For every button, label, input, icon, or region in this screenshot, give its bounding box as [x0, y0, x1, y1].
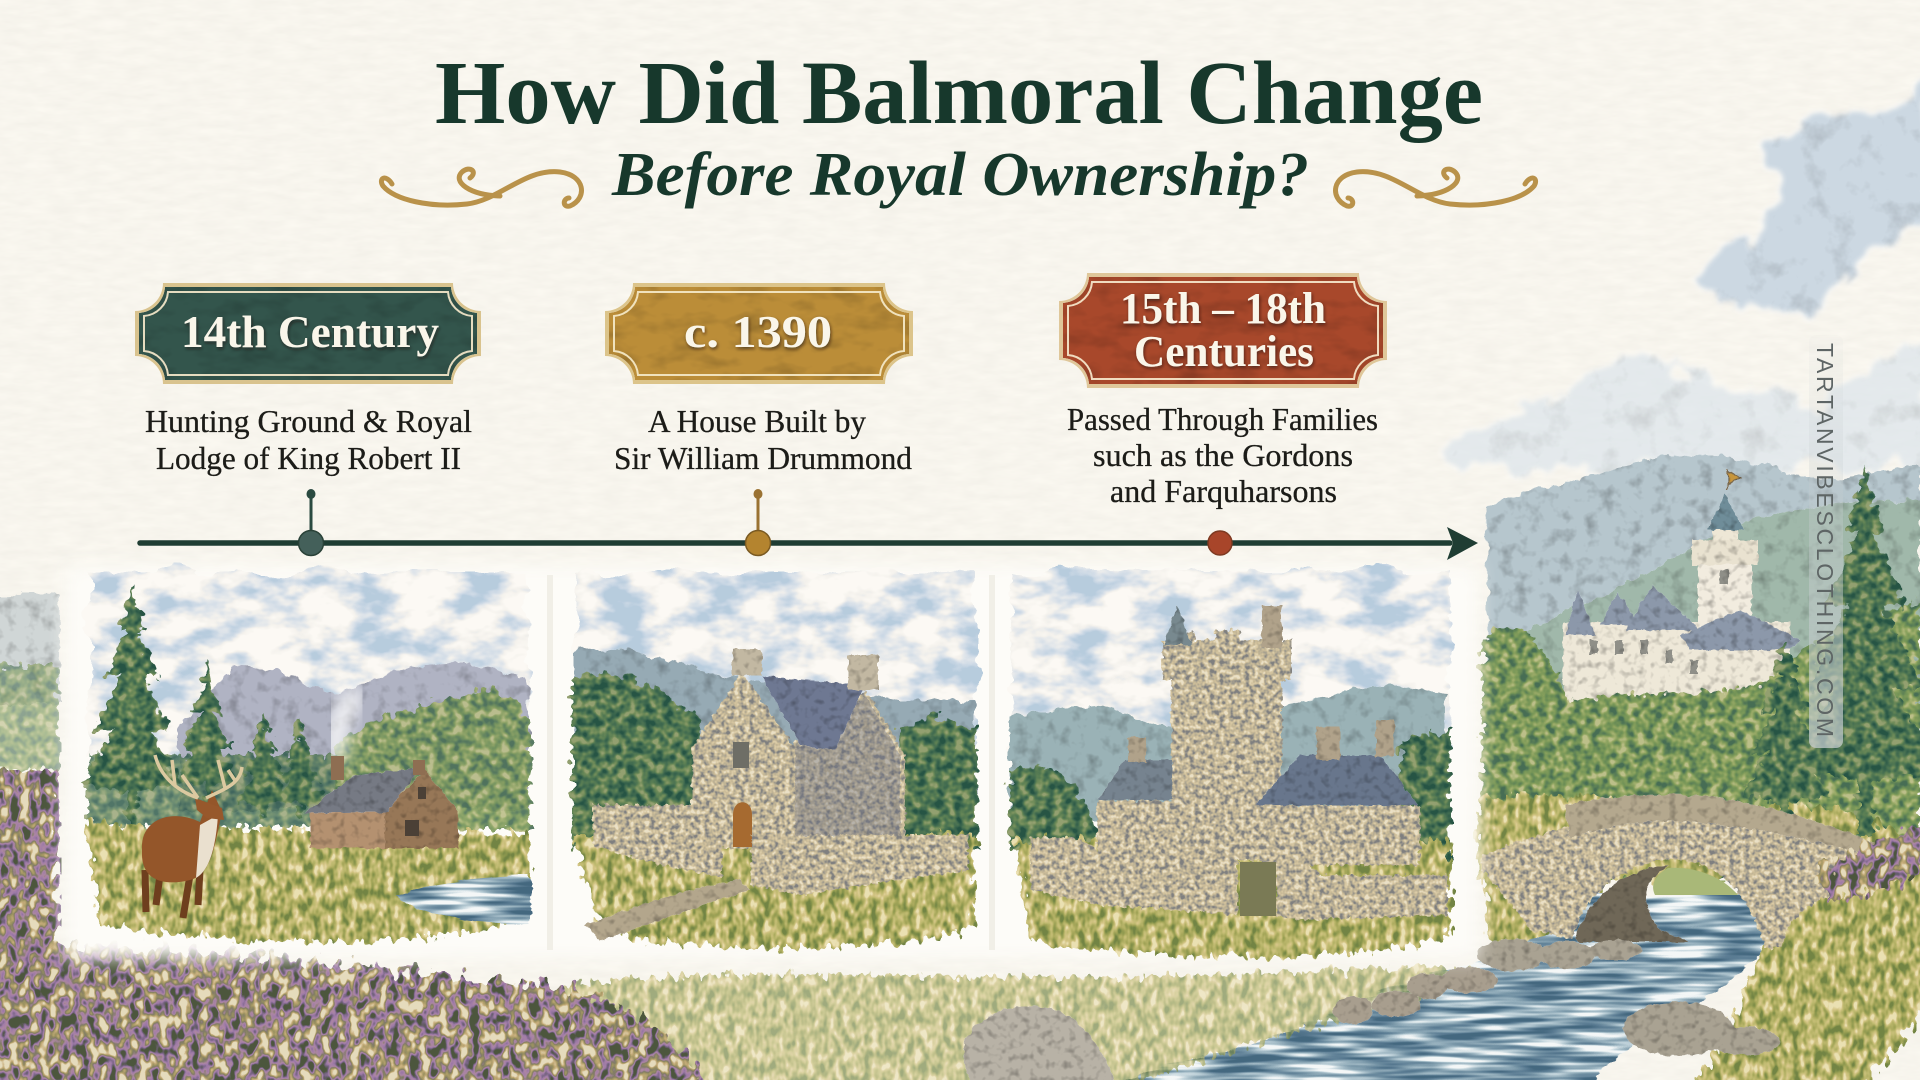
description: 15th - 18th Centuries: such as the Gordons	[1093, 437, 1353, 473]
trees	[572, 674, 977, 850]
panel: stone house painting	[572, 572, 977, 949]
river	[1100, 895, 1770, 1080]
conifers	[82, 587, 325, 827]
dry stone wall left	[593, 805, 722, 878]
badge inner line	[144, 292, 472, 375]
chimneys	[1128, 606, 1394, 762]
badge: c. 1390	[605, 283, 913, 384]
badge frame	[135, 283, 481, 384]
arch shadow	[1575, 865, 1690, 942]
bank rocks	[1333, 967, 1497, 1024]
stone house	[692, 650, 905, 850]
stream	[395, 875, 530, 923]
main tower	[1171, 675, 1282, 860]
bridge span	[1482, 812, 1895, 948]
faint panel dividers	[550, 575, 992, 950]
flourish: right	[1336, 169, 1536, 206]
description: 14th Century: Lodge of King Robert II	[156, 440, 461, 476]
right roof	[1256, 755, 1418, 805]
description: 14th Century	[145, 403, 472, 476]
cabin gable	[385, 770, 458, 848]
grass	[1015, 840, 1450, 956]
bridge parapet	[1565, 795, 1895, 858]
badge label: 15th – 18th	[1120, 284, 1326, 333]
mountains	[180, 662, 528, 810]
meadow	[85, 822, 530, 942]
house gable wall	[692, 672, 795, 848]
watermark text: TARTANVIBESCLOTHING.COM	[1812, 343, 1838, 737]
description: 15th - 18th Centuries: and Farquharsons	[1110, 473, 1337, 509]
sky	[576, 572, 974, 772]
badge inner line	[614, 292, 904, 375]
stone wall	[1030, 837, 1447, 920]
pale halo behind paintings	[66, 566, 1478, 958]
sky	[90, 572, 530, 762]
badge: 14th Century	[135, 283, 481, 384]
badge inner line	[1068, 282, 1378, 379]
badge: 15th - 18th Centuries	[1059, 273, 1387, 388]
scene: right landscape with castle, bridge and tree	[1100, 70, 1920, 1080]
chimneys	[732, 650, 878, 690]
strip trees	[0, 665, 58, 770]
badge label: 14th Century	[181, 306, 439, 357]
badge fill	[609, 287, 909, 380]
ground: heather, meadow and rocks along bottom	[0, 945, 1497, 1080]
timeline	[140, 489, 1478, 560]
chimney smoke	[336, 690, 358, 760]
river boulders	[1478, 939, 1780, 1056]
battlements	[1162, 630, 1291, 680]
badge fill	[139, 287, 477, 380]
badge frame	[1059, 273, 1387, 388]
forest hill behind castle	[1495, 500, 1920, 760]
panel: hunting lodge painting	[82, 572, 530, 942]
window	[733, 742, 749, 768]
log cabin	[303, 756, 458, 848]
description: c. 1390: Sir William Drummond	[614, 440, 912, 476]
description: 15th - 18th Centuries	[1067, 401, 1378, 509]
slate roof	[762, 676, 865, 750]
description: c. 1390	[614, 403, 912, 476]
mountains	[1486, 455, 1920, 720]
forest band	[88, 755, 338, 827]
arrow head	[1447, 527, 1478, 560]
tower house	[1097, 604, 1420, 865]
large boulder	[963, 1006, 1115, 1080]
heather on right bank	[1820, 825, 1920, 901]
left edge scene strip	[0, 595, 60, 960]
marker: 15th-18th centuries	[1208, 531, 1232, 555]
strip heather	[0, 770, 58, 960]
dirt path	[585, 880, 750, 940]
meadow	[1478, 796, 1920, 880]
arched door	[733, 802, 752, 847]
badge label	[1120, 284, 1326, 376]
description: 14th Century: Hunting Ground & Royal	[145, 403, 472, 439]
badge label: c. 1390	[684, 306, 832, 357]
watermark	[1809, 335, 1843, 748]
iron gate	[1240, 862, 1276, 916]
marker: c. 1390	[746, 489, 770, 556]
cabin chimneys	[331, 756, 425, 780]
meadow strip	[560, 969, 1480, 1080]
house back wall shade	[795, 696, 900, 846]
left roof	[1097, 760, 1172, 800]
distant hills	[1010, 685, 1445, 820]
cabin roof	[303, 768, 420, 813]
grass	[572, 835, 975, 949]
right wing	[1260, 805, 1420, 865]
heather field	[0, 945, 715, 1080]
view through arch	[1653, 868, 1738, 895]
description: 15th - 18th Centuries: Passed Through Families	[1067, 401, 1378, 437]
flourish: left	[381, 169, 581, 206]
stag legs	[145, 870, 200, 918]
trees and slope	[1010, 730, 1450, 880]
timeline line	[140, 540, 1450, 546]
stone arch bridge	[1482, 795, 1895, 948]
description: c. 1390: A House Built by	[648, 403, 866, 439]
left bank grass	[1485, 880, 1600, 950]
watermark tab	[1809, 335, 1843, 748]
stag	[142, 755, 242, 918]
dry stone wall right	[751, 835, 968, 895]
cabin window	[405, 787, 426, 836]
castle	[1563, 470, 1800, 705]
main heading: How Did Balmoral Change	[435, 44, 1483, 143]
stag antlers	[155, 755, 242, 798]
strip sky	[0, 595, 60, 705]
stag body	[142, 790, 222, 882]
badge fill	[1063, 277, 1383, 384]
cabin walls	[310, 808, 452, 848]
distant hills	[575, 648, 975, 800]
marker: 14th century	[298, 489, 324, 556]
title	[435, 44, 1483, 209]
badge frame	[605, 283, 913, 384]
badge label: Centuries	[1134, 327, 1314, 376]
wooded hill	[335, 690, 530, 830]
turret spire	[1164, 604, 1192, 645]
conifer at right edge	[1740, 466, 1920, 836]
right bank grass	[1690, 840, 1920, 1080]
left wing	[1097, 800, 1180, 860]
stag chest	[196, 815, 218, 878]
clouds	[1440, 70, 1920, 470]
wooded hillside	[1482, 600, 1920, 880]
panel: tower house painting	[1010, 570, 1450, 956]
subtitle: Before Royal Ownership?	[611, 141, 1309, 209]
house back wall	[790, 690, 905, 850]
stag head	[195, 798, 224, 820]
sky	[1012, 570, 1450, 750]
